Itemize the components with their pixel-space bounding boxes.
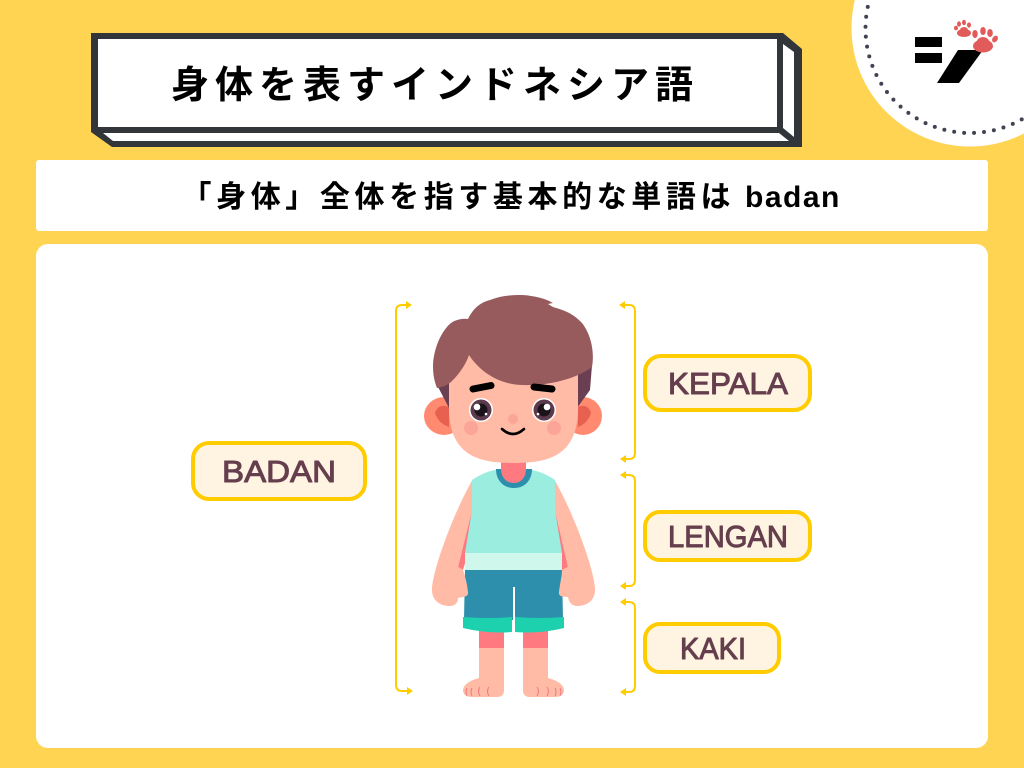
bracket: badan xyxy=(396,301,413,695)
label: kaki: KAKI xyxy=(680,631,746,666)
subtitle text: 「身体」全体を指す基本的な単語は xyxy=(182,181,735,214)
neck and collar xyxy=(496,460,532,488)
label: badan: BADAN xyxy=(222,454,336,489)
label: lengan: LENGAN xyxy=(668,519,788,554)
shorts xyxy=(463,570,564,632)
face xyxy=(449,345,578,463)
eyebrows xyxy=(473,386,552,389)
label: kepala xyxy=(645,356,810,410)
hair xyxy=(433,295,593,388)
shirt xyxy=(465,469,562,570)
title text: 身体を表すインドネシア語 xyxy=(171,65,699,107)
title box xyxy=(91,33,802,147)
side shadows xyxy=(458,510,568,570)
mouth xyxy=(502,429,524,434)
main panel xyxy=(36,244,988,748)
subtitle panel xyxy=(36,160,988,231)
arms xyxy=(432,479,473,606)
bracket: lengan xyxy=(620,471,635,590)
subtitle text: badan xyxy=(745,181,841,214)
label: lengan xyxy=(645,512,810,560)
label: kepala: KEPALA xyxy=(668,366,788,401)
logo badge xyxy=(852,0,1024,146)
eyes xyxy=(469,398,556,422)
nose and cheeks xyxy=(464,414,561,435)
label: badan xyxy=(193,443,365,499)
ears xyxy=(424,397,602,435)
bracket: kepala xyxy=(619,301,635,463)
legs and feet xyxy=(463,628,564,697)
back hair xyxy=(437,365,592,408)
label: kaki xyxy=(645,624,779,672)
illustration: boy xyxy=(424,295,602,697)
bracket: kaki xyxy=(620,598,635,696)
